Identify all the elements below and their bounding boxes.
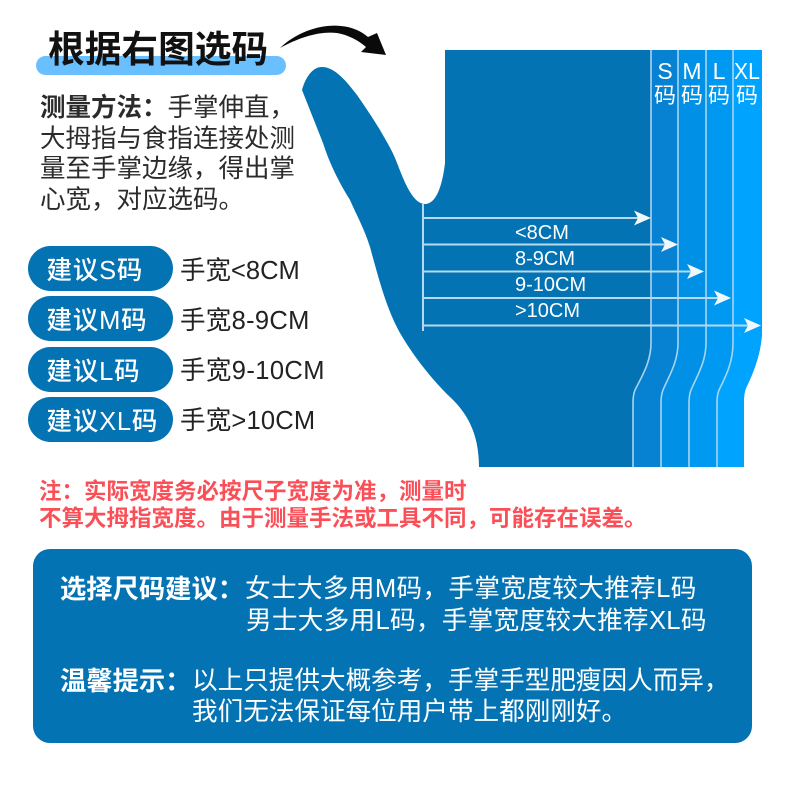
arrow: M width	[423, 237, 678, 252]
arrow: XL lower width	[423, 290, 731, 306]
band: XL	[717, 50, 762, 467]
hand width: S: 手宽<8CM	[180, 256, 300, 284]
size column labels	[654, 58, 760, 108]
measuring method line 4: 心宽，对应选码。	[40, 186, 244, 214]
size column labels: S	[657, 58, 673, 84]
hand width: L: 手宽9-10CM	[180, 356, 325, 384]
size boundary lines	[633, 50, 733, 467]
measure baseline	[422, 204, 424, 331]
hand width: M: 手宽8-9CM	[180, 306, 310, 334]
band: L	[689, 50, 733, 467]
measuring method line 1: 测量方法：手掌伸直，	[40, 94, 295, 122]
note line 1: 注：实际宽度务必按尺子宽度为准，测量时	[39, 479, 467, 504]
measuring method line 2: 大拇指与食指连接处测	[40, 124, 295, 152]
advice label: 选择尺码建议：	[60, 574, 244, 604]
pill: L size: 建议L码	[46, 358, 140, 386]
size column labels: M	[682, 58, 702, 84]
size recommendation list	[28, 246, 325, 442]
pill: S size	[28, 246, 173, 291]
range labels: 9-10CM	[515, 274, 586, 296]
band: S	[633, 50, 678, 467]
size column labels: 码	[654, 83, 676, 108]
pill: M size: 建议M码	[46, 306, 147, 334]
note line 2: 不算大拇指宽度。由于测量手法或工具不同，可能存在误差。	[39, 506, 647, 531]
text block: measuring method	[40, 94, 295, 214]
size column labels: 码	[681, 83, 703, 108]
size column labels: XL	[734, 58, 760, 84]
title: 根据右图选码	[48, 29, 268, 70]
hand width: XL: 手宽>10CM	[180, 406, 315, 434]
advice for women: 女士大多用M码，手掌宽度较大推荐L码	[245, 575, 697, 603]
range labels: 8-9CM	[515, 248, 575, 270]
range labels: >10CM	[515, 300, 580, 322]
range labels: <8CM	[515, 222, 569, 244]
arrow: curved pointer to glove	[280, 26, 386, 55]
red note	[39, 479, 647, 531]
range labels	[515, 222, 586, 322]
size column labels: 码	[708, 83, 730, 108]
arrow: XL upper width	[423, 318, 761, 333]
pill: XL size: 建议XL码	[46, 408, 158, 436]
pill: XL size	[28, 397, 173, 442]
heading highlight bar	[36, 56, 286, 75]
pill: L size	[28, 347, 173, 392]
advice for men: 男士大多用L码，手掌宽度较大推荐XL码	[246, 607, 707, 635]
size column labels: L	[713, 58, 726, 84]
measuring method line 3: 量至手掌边缘，得出掌	[40, 155, 295, 183]
glove silhouette	[302, 50, 762, 467]
size column labels: 码	[736, 83, 758, 108]
arrow: S width	[423, 210, 651, 226]
tip line 2: 我们无法保证每位用户带上都刚刚好。	[192, 698, 627, 726]
band: M	[661, 50, 706, 467]
tip line 1: 以上只提供大概参考，手掌手型肥瘦因人而异，	[192, 667, 729, 695]
tip label: 温馨提示：	[60, 666, 191, 696]
arrow: L width	[423, 264, 704, 279]
panel: size advice	[33, 549, 752, 743]
pill: S size: 建议S码	[46, 256, 143, 284]
pill: M size	[28, 296, 173, 341]
